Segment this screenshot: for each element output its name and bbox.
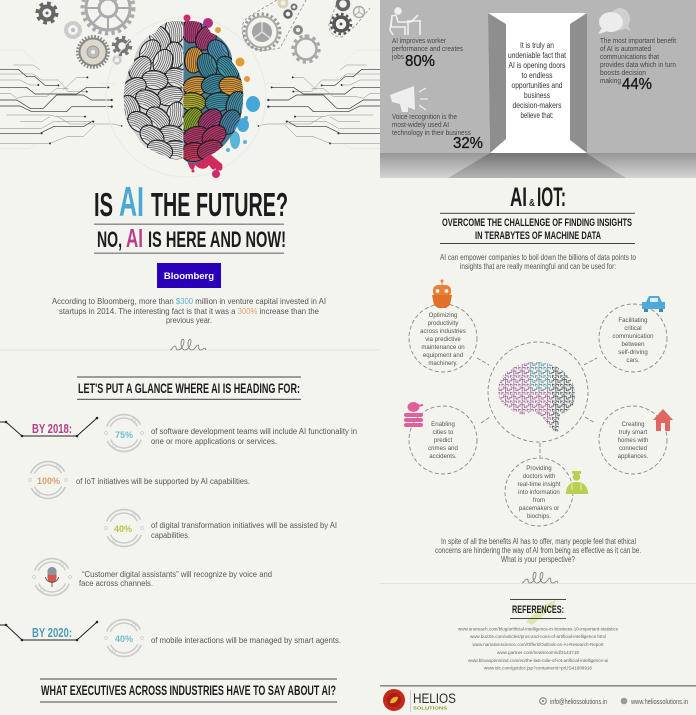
node: self-driving cars: between [621, 341, 645, 348]
Helios logo: HELIOS [413, 691, 456, 706]
node: smart homes: homes with [618, 437, 648, 444]
node: smart homes: Creating [621, 421, 645, 428]
node: cities: predict [434, 437, 452, 444]
node: doctors: into information [518, 489, 560, 496]
footer [380, 685, 696, 712]
icon: speech bubbles [598, 8, 631, 34]
email contact [540, 697, 607, 706]
stat: automated communications 44%: boosts decision [600, 68, 646, 77]
faint circle behind brain [106, 17, 266, 177]
stat: 40% mobile interactions [104, 620, 341, 656]
connectors [477, 358, 597, 457]
node: cities: crimes and [428, 445, 458, 452]
node: doctors [505, 458, 573, 526]
Bloomberg logo: Bloomberg [164, 271, 214, 282]
brain left hemisphere [124, 21, 183, 160]
Bloomberg intro paragraph: According to Bloomberg, more than $300 million in venture capital invested in AI [52, 296, 326, 306]
node: self-driving cars: critical [624, 325, 642, 332]
node: productivity: productivity [428, 320, 459, 327]
subtitle: NO, [97, 227, 122, 252]
stat: voice recognition 32%: most-widely used AI [392, 120, 449, 129]
heading: AI and IoT: & [529, 198, 535, 209]
stat: 100% [28, 462, 250, 498]
Bloomberg intro paragraph: previous year. [166, 315, 212, 325]
icon: person at desk [390, 8, 421, 35]
AI intro paragraph [440, 252, 636, 271]
closing paragraph [435, 536, 641, 564]
node: doctors: doctors with [523, 473, 555, 480]
icon: car [642, 296, 665, 312]
node: productivity: Optimizing [429, 312, 457, 319]
icon: house [653, 409, 673, 431]
door statement: decision-makers [512, 101, 562, 110]
title: IS [94, 186, 113, 223]
stat: automated communications 44% [600, 36, 677, 93]
icon: microphone [46, 567, 58, 587]
stat: worker performance 80%: 80% [405, 53, 435, 70]
stat: voice recognition 32%: Voice recognition is the [392, 112, 457, 121]
stat: voice recognition 32% [392, 112, 483, 152]
node: self-driving cars: self-driving [618, 349, 648, 356]
door statement [508, 41, 567, 120]
node: productivity: across industries [420, 328, 466, 335]
node: self-driving cars [599, 304, 667, 372]
stat: 75%: one or more applications or services. [151, 436, 277, 446]
stat: customer digital assistants with microphone: “Customer digital assistants” will recognize by voice and [82, 569, 272, 579]
stat: 40% mobile interactions: 40% [115, 634, 133, 644]
node: cities [409, 406, 477, 474]
icon: robot [432, 280, 452, 308]
stat: 100%: 100% [37, 476, 60, 486]
node: smart homes [599, 406, 667, 474]
node: productivity: machinery. [428, 360, 458, 367]
divider with flourish right [380, 572, 696, 584]
stat: automated communications 44%: of AI is automated [600, 44, 651, 53]
node: productivity: maintenance on [421, 344, 465, 351]
subheading: machine data: IN TERABYTES OF MACHINE DATA [475, 230, 601, 242]
heading: AI and IoT: IOT: [537, 182, 566, 212]
node: doctors: Providing [526, 465, 552, 472]
Bloomberg intro paragraph [52, 296, 326, 325]
references list: www.buzzle.com/articles/pros-and-cons-of-artificial-intelligence.html [470, 634, 606, 640]
gears left cluster [38, 0, 134, 68]
node: cities: Enabling [431, 421, 455, 428]
timeline marker: by 2018: BY 2018: [32, 421, 72, 436]
stat: worker performance 80%: performance and creates [392, 44, 463, 53]
node: doctors: real-time insight [517, 481, 561, 488]
Bloomberg logo [157, 263, 221, 288]
node: self-driving cars: cars. [626, 357, 640, 364]
node: doctors: from [533, 497, 545, 504]
Helios logo [383, 689, 456, 712]
stat: voice recognition 32%: 32% [453, 135, 483, 152]
references list: www.onereach.com/blog/artificial-intelligence-in-business-10-important-statistics [458, 626, 619, 632]
references list: www.bbvaopenmind.com/en/the-last-mile-of-iot-artificial-intelligence-ai [468, 658, 608, 664]
stat: automated communications 44%: 44% [622, 76, 652, 93]
door left leaf [488, 13, 506, 153]
stat: 100%: of IoT initiatives will be supported by AI capabilities. [76, 476, 250, 486]
Bloomberg intro paragraph: startups in 2014. The interesting fact is that it was a 300% increase than the [59, 306, 319, 316]
door statement: opportunities and [512, 81, 562, 90]
heading: references: REFERENCES: [512, 604, 564, 616]
node: self-driving cars: communication [613, 333, 653, 340]
title: THE FUTURE? [151, 186, 288, 223]
stat: automated communications 44%: The most important benefit [600, 36, 677, 45]
stat: 40% digital transformation: capabilities. [151, 530, 190, 540]
closing paragraph: What is your perspective? [501, 554, 575, 564]
floor [380, 153, 696, 178]
door statement: to endless [522, 71, 552, 80]
node: productivity: via predictive [425, 336, 461, 343]
node: doctors: biochips. [527, 513, 551, 520]
heading: AI and IoT [510, 182, 566, 212]
colour splashes [184, 14, 260, 178]
brain right hemisphere coloured [183, 21, 244, 164]
icon: pink stack [404, 402, 423, 427]
Helios logo: SOLUTIONS [413, 706, 447, 710]
subheading: machine data [440, 213, 635, 244]
icon: megaphone [390, 86, 428, 112]
stat: 75% [104, 414, 357, 452]
stat: 40% digital transformation [104, 510, 337, 546]
door statement: business [524, 91, 550, 100]
timeline marker: by 2020: BY 2020: [32, 625, 72, 640]
hub diagram: AI uses [404, 280, 673, 526]
title: AI [119, 178, 144, 225]
node: smart homes: connected [619, 445, 647, 452]
stat: voice recognition 32%: technology in their business [392, 128, 471, 137]
stat: automated communications 44%: provides data which in turn [600, 60, 676, 69]
stat: customer digital assistants with microphone [32, 558, 272, 596]
gears right cluster [242, 0, 370, 62]
node: cities: accidents. [429, 453, 457, 460]
hub circle with circuit brain [488, 342, 588, 442]
node: doctors: pacemakers or [519, 505, 559, 512]
references list: www.gartner.com/newsroom/id/3143718 [497, 650, 579, 656]
stat: 40% digital transformation: of digital transformation initiatives will be assisted by AI [151, 520, 337, 530]
stat: 40% digital transformation: 40% [114, 524, 132, 534]
floor light trapezoid [448, 153, 626, 178]
heading: references [510, 599, 566, 625]
panel: executive statistics door [380, 0, 696, 178]
references list: www.narrativescience.com/Offers/Outlook-on-AI-Research-Report [472, 642, 604, 648]
timeline marker: by 2020 [0, 621, 98, 641]
stat: worker performance 80% [391, 36, 463, 70]
icon: doctor [566, 471, 588, 494]
heading: glance: LET'S PUT A GLANCE WHERE AI IS HEADING FOR: [78, 381, 300, 396]
email contact: info@heliossolutions.in [550, 697, 607, 706]
divider with flourish left [0, 339, 380, 350]
timeline marker: by 2018 [0, 417, 98, 437]
door statement: undeniable fact that [508, 51, 567, 60]
node: self-driving cars: Facilitating [618, 317, 648, 324]
circuit lines right [258, 50, 380, 148]
AI intro paragraph: insights that are really meaningful and can be used for: [460, 261, 616, 271]
open door [488, 13, 587, 153]
references list [458, 626, 619, 672]
stat: 40% mobile interactions: of mobile interactions will be managed by smart agents. [151, 635, 341, 645]
stat: 75%: of software development teams will include AI functionality in [151, 426, 357, 436]
stat: worker performance 80%: jobs [391, 52, 404, 61]
node: productivity [409, 304, 477, 372]
subtitle: AI [126, 223, 143, 253]
stat: automated communications 44%: communications that [600, 52, 660, 61]
AI intro paragraph: AI can empower companies to boil down the billions of data points to [440, 252, 636, 262]
subtitle [94, 223, 286, 254]
title [94, 178, 288, 225]
subtitle: IS HERE AND NOW! [148, 227, 286, 252]
door statement: AI is opening doors [508, 61, 566, 70]
wall [380, 0, 696, 153]
hero illustration: brain, gears and circuits [0, 0, 380, 178]
heading: executives: WHAT EXECUTIVES ACROSS INDUSTRIES HAVE TO SAY ABOUT AI? [41, 683, 336, 698]
node: smart homes: appliances. [618, 453, 649, 460]
node: smart homes: truly smart [619, 429, 648, 436]
stat: worker performance 80%: AI improves worker [392, 36, 446, 45]
circuit lines left [0, 50, 122, 148]
door statement: believe that: [520, 111, 554, 120]
references list: www.idc.com/getdoc.jsp?containerId=prUS41888916 [484, 666, 592, 672]
heading: AI and IoT: AI [510, 182, 527, 212]
node: productivity: equipment and [423, 352, 463, 359]
stat: automated communications 44%: making [600, 76, 621, 85]
door right leaf [570, 13, 587, 153]
stat: customer digital assistants with microphone: face across channels. [79, 578, 153, 588]
node: cities: cities to [433, 429, 454, 436]
door statement: It is truly an [520, 41, 554, 50]
stat: 75%: 75% [115, 430, 133, 440]
